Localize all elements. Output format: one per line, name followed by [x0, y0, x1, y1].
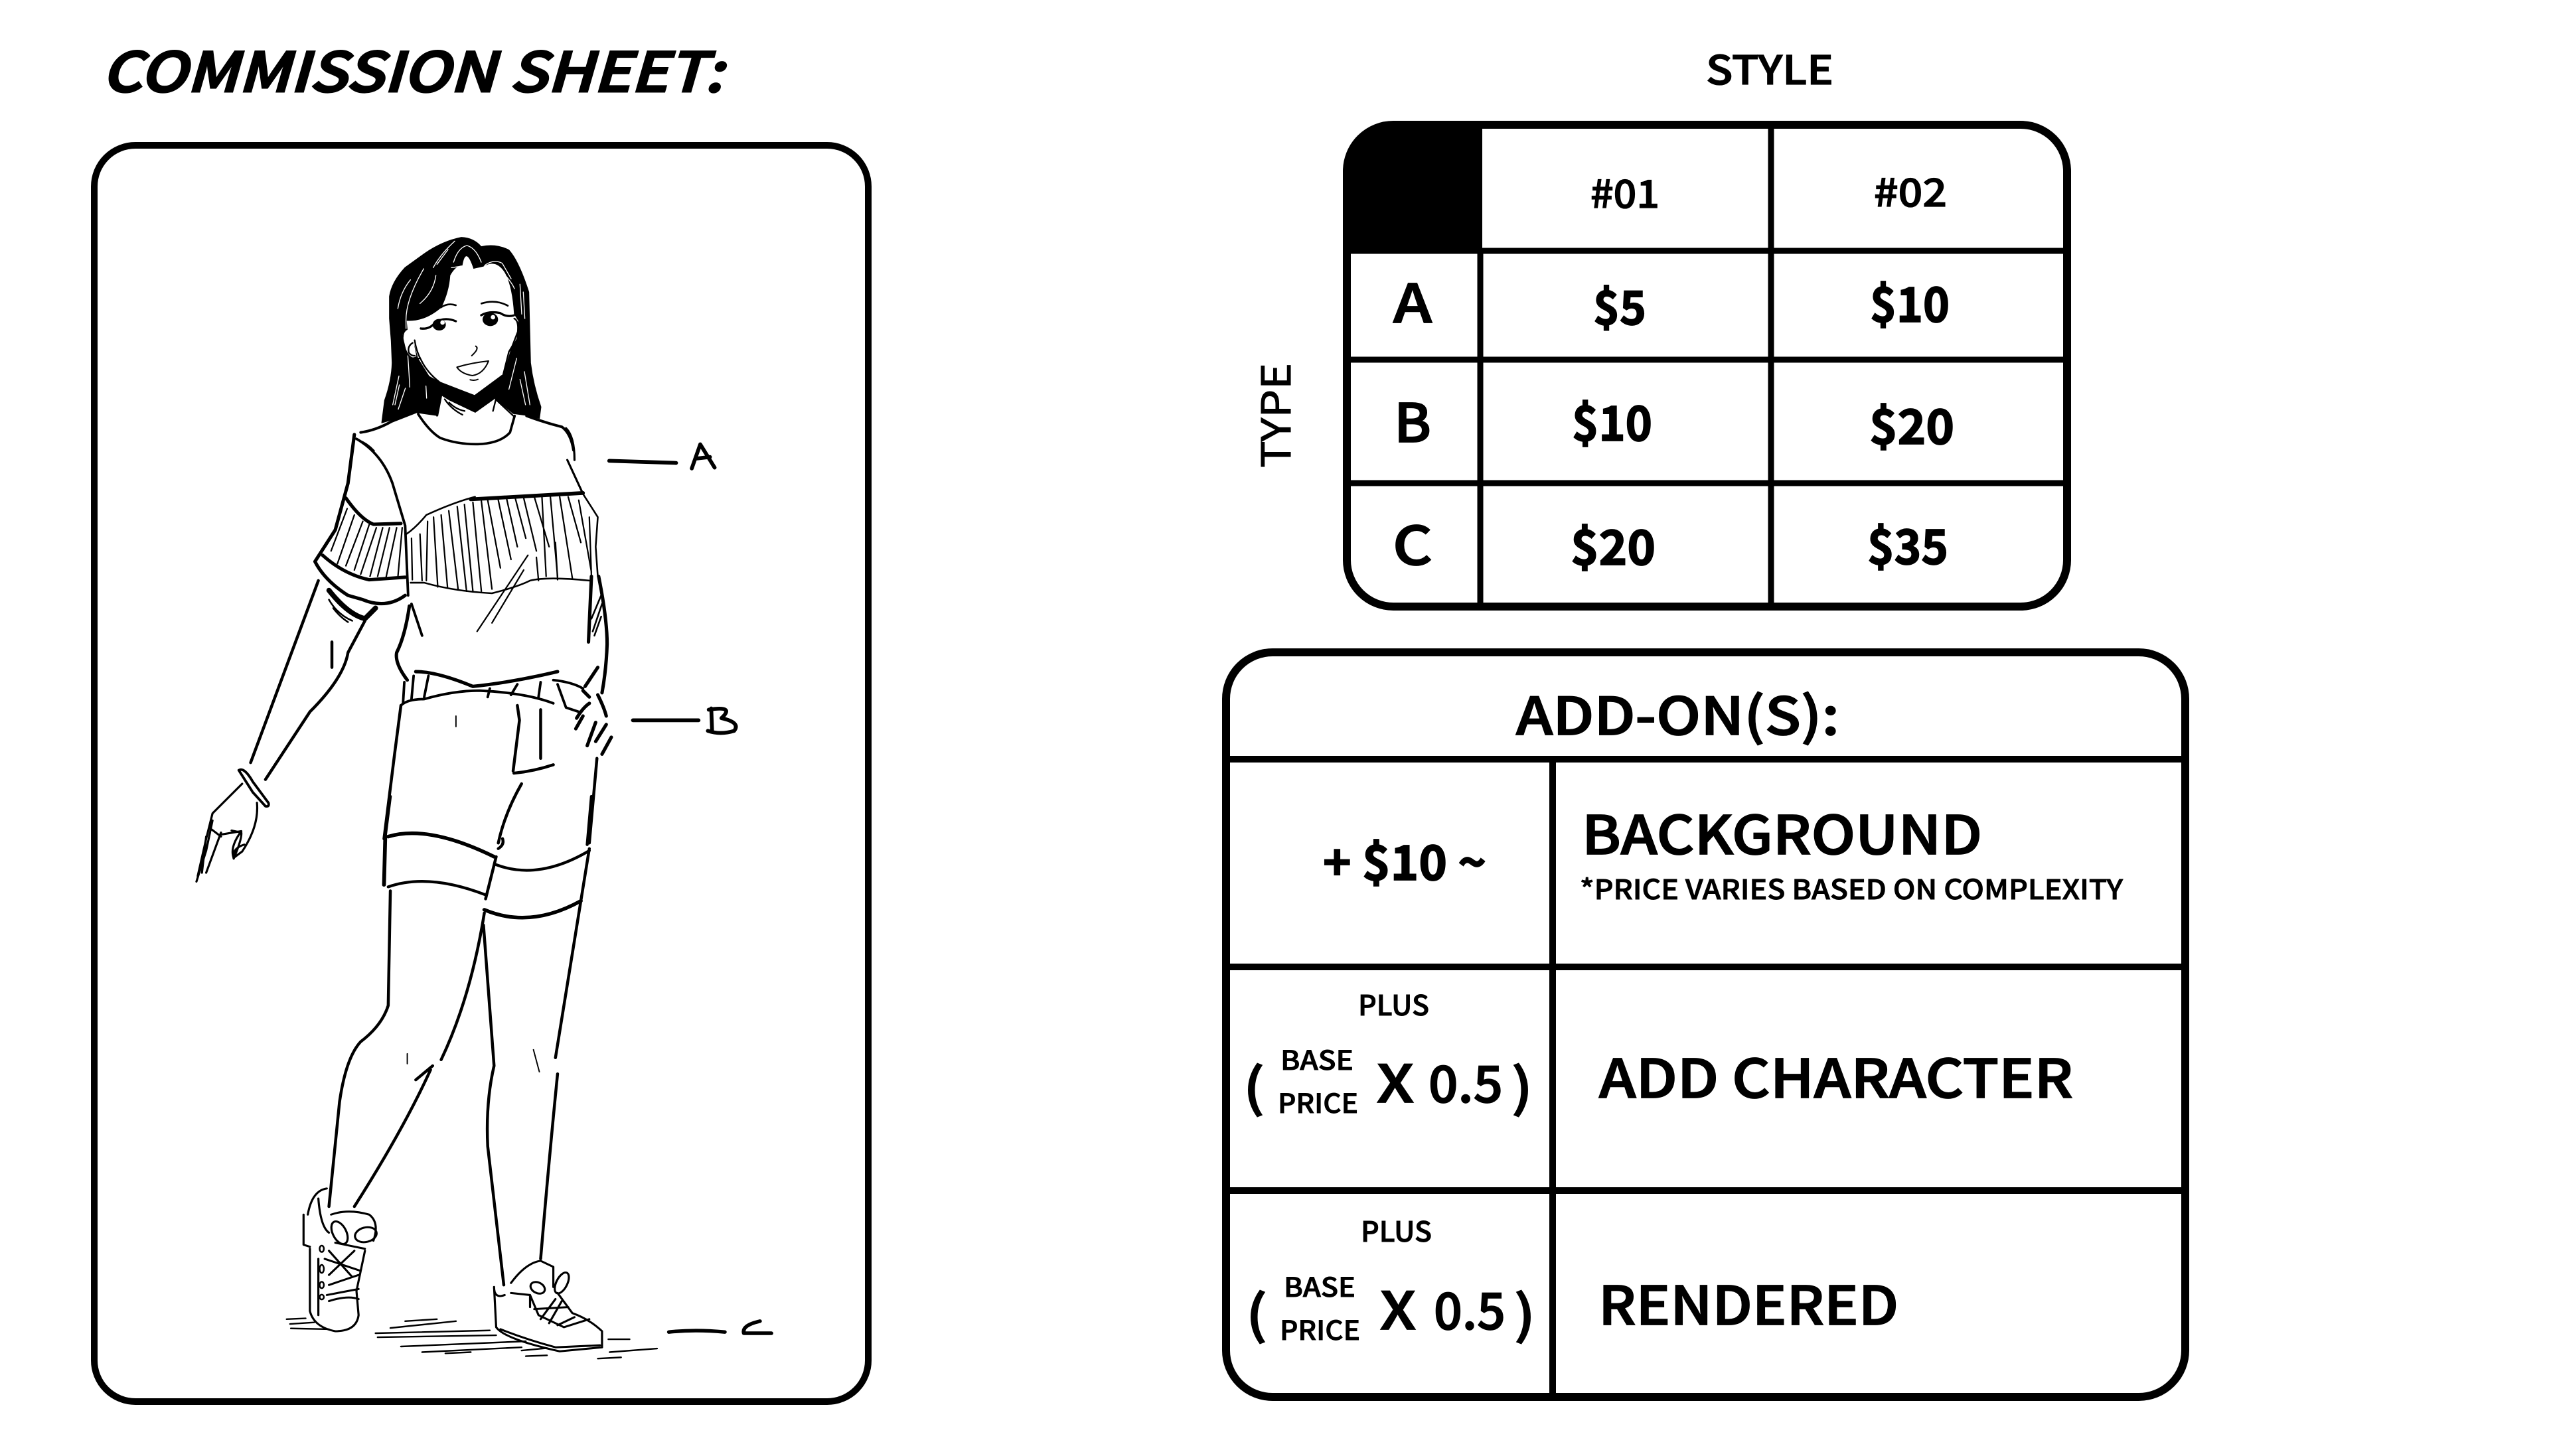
add character label: ADD CHARACTER: [1599, 1037, 2073, 1114]
rendered price formula: BASE: [1284, 1266, 1355, 1305]
rendered label: RENDERED: [1598, 1264, 1898, 1341]
rendered price formula: PLUS: [1361, 1210, 1432, 1250]
price B #01: $10: [1572, 385, 1652, 455]
add character price formula: 0.5: [1429, 1044, 1503, 1117]
price C #01: $20: [1571, 509, 1656, 579]
price B #02: $20: [1869, 388, 1954, 458]
rendered price formula: 0.5: [1434, 1271, 1506, 1344]
panel: character illustration: [94, 145, 868, 1402]
panel: add-ons table: [1226, 652, 2185, 1397]
table black corner cell: [1347, 125, 1482, 254]
label: style: STYLE: [1706, 38, 1833, 96]
figure torso, arms and shorts: [198, 428, 736, 876]
add-ons heading: ADD-ON(S):: [1516, 676, 1839, 750]
price C #02: $35: [1867, 508, 1948, 578]
add character price formula: PLUS: [1358, 983, 1429, 1024]
rendered price formula: X: [1380, 1270, 1416, 1345]
add character price formula: ): [1511, 1047, 1533, 1122]
column header #01: #01: [1590, 163, 1660, 219]
add character price formula: X: [1377, 1043, 1414, 1118]
rendered price formula: (: [1246, 1274, 1267, 1348]
rendered price formula: ): [1514, 1274, 1535, 1348]
add character price formula: PRICE: [1278, 1082, 1358, 1121]
title: COMMISSION SHEET:: [102, 29, 727, 108]
add character price formula: (: [1243, 1047, 1265, 1122]
price A #01: $5: [1593, 271, 1646, 338]
row label C: C: [1393, 504, 1432, 581]
rendered price formula: PRICE: [1280, 1309, 1360, 1348]
label: type: TYPE: [1245, 363, 1302, 468]
background note: *PRICE VARIES BASED ON COMPLEXITY: [1580, 867, 2123, 907]
background price: + $10 ~: [1323, 824, 1486, 894]
column header #02: #02: [1874, 162, 1947, 218]
add character price formula: BASE: [1280, 1039, 1353, 1078]
figure legs and shoes: [196, 796, 771, 1358]
price A #02: $10: [1870, 266, 1950, 336]
row label B: B: [1394, 381, 1431, 458]
illustration: woman in t-shirt and shorts: [196, 238, 771, 1358]
rendered price formula: [1246, 1210, 1535, 1348]
panel: price table: [1347, 125, 2067, 607]
background label: BACKGROUND: [1582, 793, 1982, 870]
add character price formula: [1243, 983, 1533, 1122]
figure head and hair: [358, 238, 574, 451]
row label A: A: [1393, 261, 1432, 338]
